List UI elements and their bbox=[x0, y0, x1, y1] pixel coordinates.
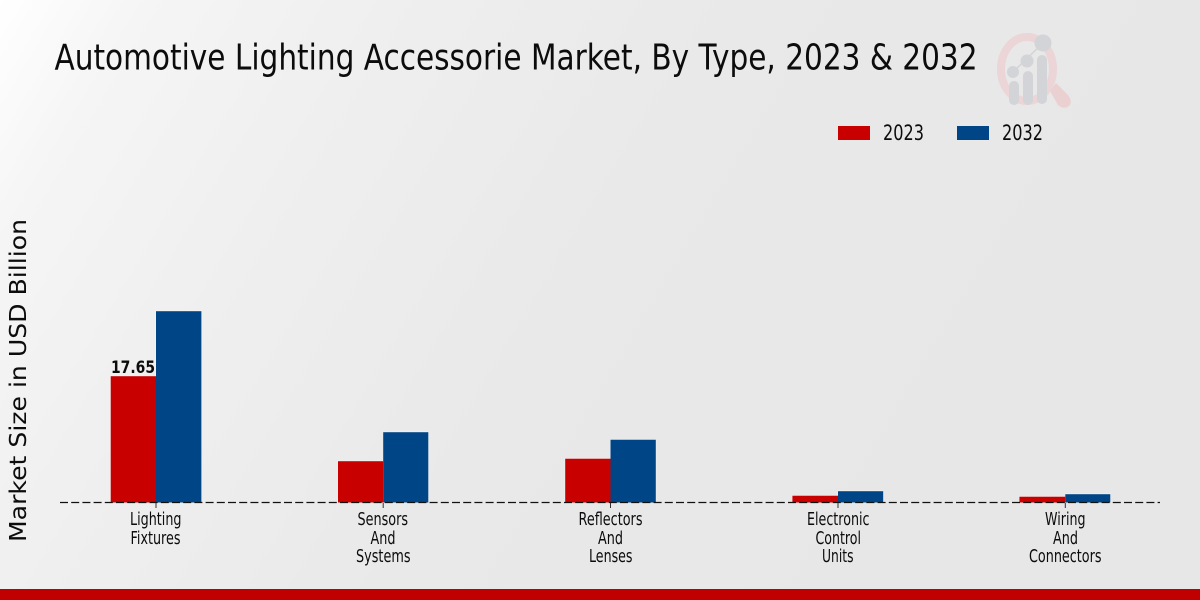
category label: Wiring And Connectors: Wiring bbox=[1045, 510, 1086, 530]
legend swatch 2032 bbox=[957, 126, 989, 140]
y axis label: Market Size in USD Billion bbox=[6, 219, 32, 542]
bars: Reflectors And Lenses bbox=[565, 439, 656, 502]
bar chart bbox=[60, 310, 1160, 508]
legend label 2032: 2032 bbox=[1002, 121, 1043, 146]
category label: Sensors And Systems: And bbox=[370, 529, 396, 549]
category label: Wiring And Connectors bbox=[1029, 510, 1102, 567]
category label: Electronic Control Units: Units bbox=[822, 547, 854, 567]
category label: Electronic Control Units bbox=[807, 510, 870, 567]
value label 17.65: 17.65 bbox=[111, 358, 155, 378]
category label: Electronic Control Units: Electronic bbox=[807, 510, 870, 530]
category label: Lighting Fixtures: Lighting bbox=[130, 510, 182, 530]
category label: Sensors And Systems: Systems bbox=[356, 547, 410, 567]
title: Automotive Lighting Accessorie Market, By Type, 2023 & 2032 bbox=[54, 38, 978, 78]
legend swatch 2023 bbox=[838, 126, 870, 140]
legend bbox=[838, 121, 1043, 146]
footer strip bbox=[0, 589, 1200, 600]
category label: Lighting Fixtures: Fixtures bbox=[130, 529, 180, 549]
category label: Sensors And Systems bbox=[356, 510, 410, 567]
category label: Reflectors And Lenses: Lenses bbox=[589, 547, 632, 567]
category label: Wiring And Connectors: And bbox=[1053, 529, 1078, 549]
category label: Wiring And Connectors: Connectors bbox=[1029, 547, 1102, 567]
category label: Electronic Control Units: Control bbox=[816, 529, 861, 549]
bars: Lighting Fixtures bbox=[110, 310, 202, 502]
icon: watermark logo magnifier with bars bbox=[1001, 34, 1071, 108]
category label: Lighting Fixtures bbox=[130, 510, 182, 549]
legend label 2023: 2023 bbox=[883, 121, 924, 146]
bars: Electronic Control Units bbox=[792, 491, 884, 503]
category label: Sensors And Systems: Sensors bbox=[358, 510, 408, 530]
category label: Reflectors And Lenses: And bbox=[598, 529, 623, 549]
category label: Reflectors And Lenses bbox=[578, 510, 642, 567]
bars: Wiring And Connectors bbox=[1019, 494, 1111, 503]
category label: Reflectors And Lenses: Reflectors bbox=[578, 510, 642, 530]
bars: Sensors And Systems bbox=[338, 432, 429, 503]
